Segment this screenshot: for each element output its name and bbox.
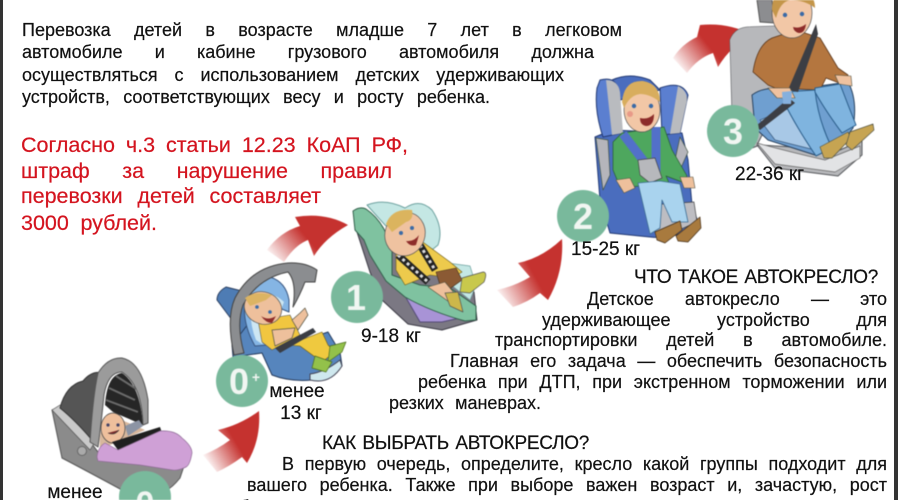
section: what is a child seat: Главная его задача — обеспечить безопасность [450,351,887,371]
section: what is a child seat: ЧТО ТАКОЕ АВТОКРЕСЛО? [634,267,878,288]
left page edge [0,0,3,500]
section: what is a child seat: резких маневрах. [389,393,541,413]
section: what is a child seat: ребенка при ДТП, при экстренном торможении или [418,372,887,392]
intro paragraph: устройств, соответствующих весу и росту ребенка. [22,87,490,107]
seat: group 3 booster [730,0,874,176]
badge: group 3 [707,105,759,157]
arrow: group 2 to 3 [673,24,753,73]
badge: group 2 [557,190,609,242]
badge: group 2: 2 [573,196,593,237]
badge: group 0+ [216,355,268,407]
weight labels: 22-36 кг [735,164,804,185]
section: how to choose a child seat: В первую очередь, определите, кресло какой группы подходит для [282,454,887,474]
section: what is a child seat: удерживающее устройство для [542,310,887,330]
weight labels: 15-25 кг [571,239,640,260]
right page edge [894,0,898,500]
arrow: group 0 to 0+ [203,411,259,472]
badge: group 0 [119,471,171,500]
fine notice in red: перевозки детей составляет [21,184,321,208]
weight labels: менее [269,381,325,402]
child [753,30,848,90]
child [396,240,462,285]
seat: group 1 reclined [353,202,486,330]
child face [101,413,125,443]
intro paragraph: автомобиле и кабине грузового автомобиля должна [22,42,594,62]
weight labels: 9-18 кг [361,326,421,347]
weight labels: 13 кг [280,403,322,424]
child [258,315,300,350]
badge: group 1: 1 [346,277,366,318]
seat: group 0 carrier [52,358,192,491]
fine notice in red: 3000 рублей. [21,211,157,235]
section: what is a child seat: транспортировки детей в автомобиле. [495,330,887,350]
child [613,127,687,187]
seat: group 2 forward facing [595,76,701,243]
fine notice in red: Согласно ч.3 статьи 12.23 КоАП РФ, [21,133,408,157]
badge: group 3: 3 [723,111,743,152]
arrow: group 0+ to 1 [267,216,348,262]
fine notice in red: штраф за нарушение правил [21,159,392,183]
seat: group 0+ carrier [217,263,346,381]
badge: group 1 [331,271,383,323]
intro paragraph: осуществляться с использованием детских удерживающих [22,65,564,85]
arrow: group 1 to 2 [497,239,562,307]
section: what is a child seat: Детское автокресло — это [587,289,887,309]
section: how to choose a child seat: вашего ребенка. Также при выборе важен возраст и, зачастую, рост [247,475,887,495]
section: how to choose a child seat: КАК ВЫБРАТЬ АВТОКРЕСЛО? [322,433,589,454]
intro paragraph: Перевозка детей в возрасте младше 7 лет в легковом [22,20,622,40]
badge: group 0+: 0 [229,361,249,402]
badge: group 0+: + [252,369,260,385]
